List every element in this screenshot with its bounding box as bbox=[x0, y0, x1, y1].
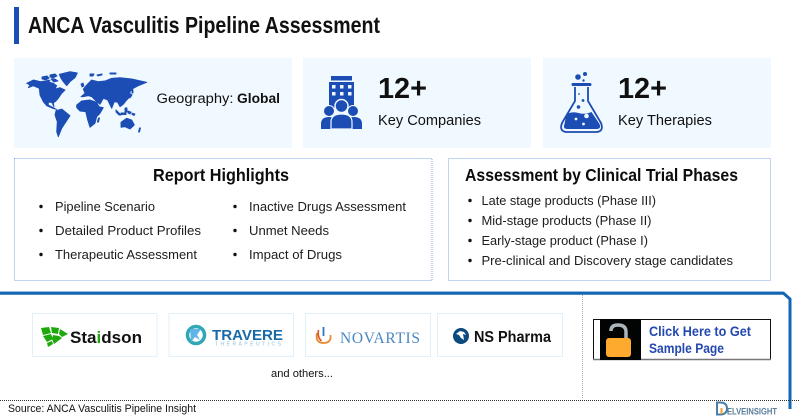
source note: Source: ANCA Vasculitis Pipeline Insight bbox=[8, 403, 197, 415]
geography label: Global bbox=[237, 91, 280, 107]
list: highlights column 1: Therapeutic Assessment bbox=[55, 247, 197, 262]
icon: open padlock bbox=[606, 325, 631, 357]
list: phases: Mid-stage products (Phase II) bbox=[482, 213, 652, 228]
list: phases: Late stage products (Phase III) bbox=[482, 193, 656, 208]
list: phases: Early-stage product (Phase I) bbox=[482, 233, 648, 248]
logo: DelveInsight: ELVEINSIGHT bbox=[727, 406, 777, 418]
logo: Staidson: Staidson bbox=[70, 329, 142, 347]
icon: flask bbox=[561, 72, 602, 132]
panel: clinical trial phases bbox=[448, 158, 770, 280]
icon: world map bbox=[27, 72, 147, 137]
list: highlights column 1: Pipeline Scenario bbox=[55, 199, 155, 214]
list: highlights column 2: Impact of Drugs bbox=[249, 247, 342, 262]
button label: Sample Page bbox=[649, 340, 724, 356]
column divider bbox=[582, 295, 584, 399]
panel: geography bbox=[14, 58, 292, 148]
heading: report highlights: Report Highlights bbox=[153, 165, 289, 185]
label: key therapies: Key Therapies bbox=[618, 112, 712, 129]
stat: 12+ companies: 12+ bbox=[378, 73, 427, 105]
logo: Travere Therapeutics: TRAVERE bbox=[212, 328, 283, 344]
title bbox=[14, 7, 380, 44]
stat: 12+ therapies: 12+ bbox=[618, 73, 667, 105]
geography label: Geography: bbox=[156, 91, 234, 107]
bottom section frame bbox=[0, 292, 790, 409]
logo: Novartis: NOVARTIS bbox=[340, 330, 420, 347]
list: highlights column 1 bbox=[39, 199, 201, 262]
logo: Staidson bbox=[32, 314, 157, 356]
list: highlights column 1: Detailed Product Profiles bbox=[55, 223, 201, 238]
logo: NS Pharma: NS Pharma bbox=[474, 329, 551, 346]
geography label bbox=[156, 91, 280, 107]
list: phases: Pre-clinical and Discovery stage candidates bbox=[482, 253, 733, 268]
list: highlights column 2: Unmet Needs bbox=[249, 223, 329, 238]
button: sample page bbox=[593, 319, 771, 360]
text: and others: and others... bbox=[271, 368, 333, 380]
panel: key companies bbox=[303, 58, 531, 148]
list: highlights column 2: Inactive Drugs Assessment bbox=[249, 199, 406, 214]
logo: DelveInsight bbox=[717, 402, 777, 418]
logo: Travere Therapeutics bbox=[169, 314, 294, 356]
footer dotted rule bbox=[0, 400, 800, 402]
list: phases bbox=[468, 193, 733, 268]
title: ANCA Vasculitis Pipeline Assessment bbox=[28, 12, 380, 38]
logo: Novartis bbox=[306, 314, 430, 356]
logo: Travere Therapeutics: THERAPEUTICS bbox=[215, 342, 282, 348]
button label: Click Here to Get bbox=[649, 323, 751, 339]
panel: key therapies bbox=[543, 58, 771, 148]
button label bbox=[649, 323, 751, 356]
list: highlights column 2 bbox=[233, 199, 406, 262]
icon: building with people bbox=[321, 76, 362, 129]
panel: report highlights bbox=[14, 158, 432, 280]
label: key companies: Key Companies bbox=[378, 112, 481, 129]
heading: clinical trial phases: Assessment by Clinical Trial Phases bbox=[465, 165, 738, 185]
logo: NS Pharma bbox=[438, 314, 562, 356]
